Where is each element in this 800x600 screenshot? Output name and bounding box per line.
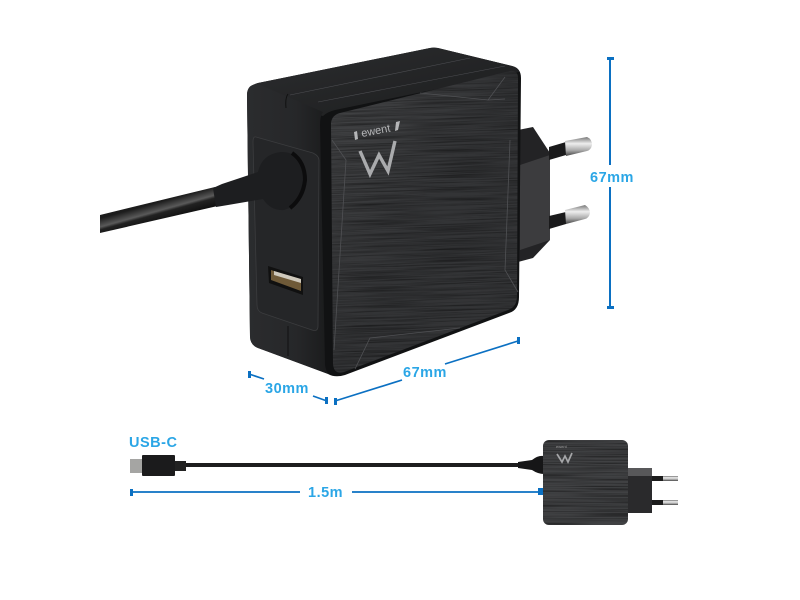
dimension: cable 1.5m: 1.5m bbox=[308, 485, 343, 501]
small plug bbox=[628, 468, 678, 513]
dimension: width 67mm: 67mm bbox=[403, 365, 447, 381]
top face bbox=[248, 48, 519, 116]
small logo: ewent bbox=[556, 444, 568, 449]
USB-C connector and cable bbox=[130, 455, 521, 476]
dimension: width 67mm bbox=[334, 337, 520, 405]
side recessed panel bbox=[253, 137, 319, 330]
logo: ewent: ewent bbox=[360, 123, 391, 140]
front face bbox=[331, 71, 518, 373]
body silhouette bbox=[247, 48, 521, 376]
dimension: height 67mm bbox=[590, 57, 634, 309]
label: USB-C: USB-C bbox=[129, 435, 177, 451]
small body bbox=[543, 440, 628, 525]
plug pins bbox=[549, 137, 592, 229]
logo: ewent bbox=[354, 121, 400, 174]
small logo bbox=[556, 444, 572, 462]
EU plug bbox=[518, 127, 592, 262]
dimension: height 67mm: 67mm bbox=[590, 170, 634, 186]
side face bbox=[247, 84, 329, 374]
dimension: depth 30mm bbox=[248, 371, 328, 404]
dimension: cable 1.5m bbox=[130, 485, 543, 501]
charger: small front view bbox=[518, 440, 678, 525]
small strain relief bbox=[518, 456, 544, 474]
USB-A port bbox=[268, 266, 303, 295]
charger: large perspective view bbox=[100, 46, 592, 394]
cable with strain relief bbox=[100, 152, 307, 233]
infographic: charger dimensions bbox=[100, 48, 678, 525]
brushed metal texture bbox=[331, 72, 518, 372]
small body texture bbox=[543, 440, 628, 525]
dimension: depth 30mm: 30mm bbox=[265, 381, 309, 397]
